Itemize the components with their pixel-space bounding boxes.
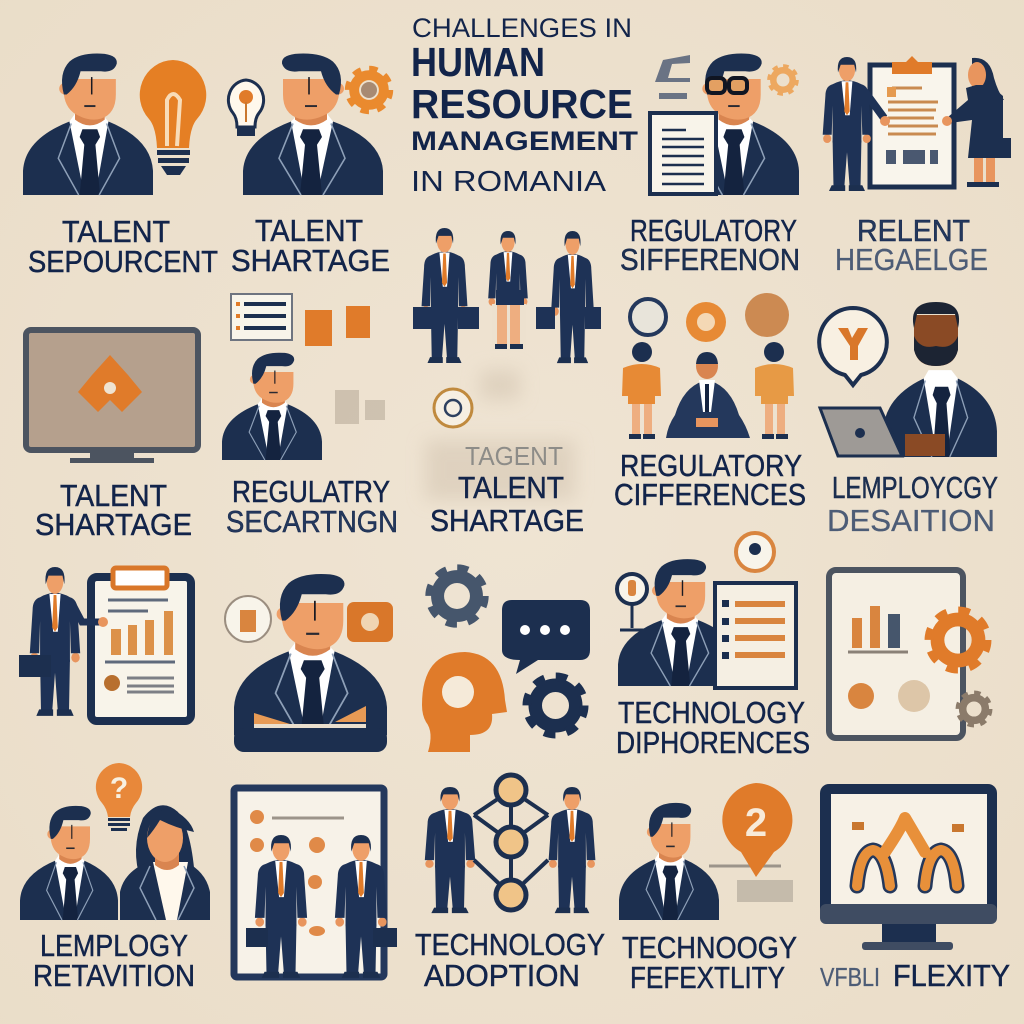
- title: CHALLENGES IN: [412, 13, 632, 43]
- briefcase: [19, 655, 51, 677]
- panel: regulatory cifferences: [614, 293, 806, 512]
- label: TECHNOLOGY: [415, 927, 605, 962]
- label: CIFFERENCES: [614, 477, 806, 512]
- briefcases: [246, 928, 397, 947]
- title: IN ROMANIA: [411, 166, 607, 198]
- woman right: [942, 58, 1011, 187]
- label: HEGAELGE: [835, 242, 988, 277]
- panel: employcgy desaition: [819, 302, 998, 538]
- faint smudge: [425, 370, 575, 500]
- label: [415, 927, 605, 993]
- icon: list panel: [715, 583, 796, 688]
- label: [33, 928, 195, 993]
- label: RETAVITION: [33, 958, 195, 993]
- label: SIFFERENON: [620, 242, 800, 277]
- icon: orange head: [422, 652, 507, 752]
- label: [430, 441, 584, 538]
- panel: two men on board: [234, 788, 397, 978]
- icon: question bulb: ?: [110, 772, 128, 805]
- label: TAGENT: [465, 441, 563, 471]
- panel: three standing men: [413, 228, 601, 538]
- label: VFBLI: [820, 962, 880, 992]
- dark skin face: [913, 302, 959, 366]
- label: SEPOURCENT: [28, 244, 218, 279]
- panel: relent hegaelge: [823, 56, 1011, 277]
- label: [616, 695, 810, 760]
- seated figure: [666, 352, 750, 438]
- label: REGULATORY: [630, 213, 797, 248]
- title: [411, 13, 639, 198]
- icon: laptop: [820, 408, 902, 456]
- label: TECHNOOGY: [622, 930, 797, 965]
- clipboard: [870, 56, 954, 187]
- icon: orange pin: 2: [745, 801, 767, 845]
- presenter: [30, 567, 108, 716]
- icon: document: [650, 113, 716, 194]
- label: DESAITION: [827, 503, 995, 538]
- icon: glasses: [707, 78, 747, 93]
- faded chart: [335, 390, 385, 424]
- panel: technology adoption: [415, 775, 605, 993]
- icons: three circles: [630, 293, 789, 342]
- icon: light bulb: [140, 60, 206, 175]
- label: REGULATRY: [232, 474, 390, 509]
- icon: small flourishes: [852, 822, 964, 832]
- label: TECHNOLOGY: [618, 695, 805, 730]
- panel: employ retavition: [20, 763, 210, 993]
- faded bars: [737, 880, 793, 902]
- panel: talent shartage 1: [228, 54, 390, 278]
- man left: [823, 57, 890, 191]
- icon: target: [225, 596, 271, 642]
- icon: orange boxes: [305, 306, 370, 346]
- panel: talent sepourcent: [23, 54, 218, 279]
- label: [614, 448, 806, 512]
- icon: orange gear: [929, 611, 987, 669]
- label: LEMPLOGY: [40, 928, 188, 963]
- icon: dark gear: [430, 569, 484, 623]
- briefcases: [413, 307, 601, 329]
- panel: regulatory sifferenon: [620, 54, 800, 277]
- label: [820, 958, 1010, 993]
- label: [620, 213, 800, 277]
- label: FEFEXTLITY: [630, 960, 785, 995]
- panel: man with clipboard chart: [19, 567, 191, 721]
- panel: head with gears and speech: [422, 569, 590, 752]
- icon: speech bubble: [502, 600, 590, 674]
- label: RELENT: [857, 213, 970, 248]
- icon: tablet: [829, 570, 963, 738]
- label: TALENT: [62, 214, 170, 249]
- icon: orange pin: [709, 783, 792, 877]
- woman: [120, 805, 210, 920]
- clipboard: [91, 568, 191, 721]
- icon: question bulb: [96, 763, 142, 831]
- label: TALENT: [60, 478, 167, 513]
- panel: tablet with gear: [829, 570, 990, 738]
- label: REGULATORY: [620, 448, 802, 483]
- icon: microphone: [617, 574, 647, 630]
- board: [234, 788, 384, 977]
- label: TALENT: [255, 213, 363, 248]
- figures: [622, 342, 794, 439]
- network nodes: [474, 775, 548, 910]
- arm: [905, 434, 945, 456]
- label: DIPHORENCES: [616, 725, 810, 760]
- panel: crossed arms man: [225, 574, 393, 752]
- label: SECARTNGN: [226, 504, 398, 539]
- label: SHARTAGE: [231, 243, 390, 278]
- title: HUMAN: [411, 39, 545, 85]
- crossed arms: [234, 706, 387, 752]
- icon: gear: [348, 69, 390, 111]
- label: [231, 213, 390, 278]
- panel: technology diphorences: [616, 533, 810, 760]
- panel: regulatry secartngn: [222, 294, 398, 539]
- icon: keyhole badge: [736, 533, 774, 571]
- panel: monitor flexity: [820, 784, 1010, 993]
- label: ADOPTION: [424, 958, 580, 993]
- label: FLEXITY: [893, 958, 1010, 993]
- icon: stamp: [655, 55, 690, 99]
- label: [226, 474, 398, 539]
- label: [827, 470, 998, 538]
- title: RESOURCE: [411, 81, 633, 127]
- panel: technology fefextlity: [619, 783, 797, 995]
- label: SHARTAGE: [430, 503, 584, 538]
- icon: speech bubble: [819, 308, 887, 385]
- icon: orange gear: [769, 66, 797, 94]
- icon: monitor: [820, 784, 997, 950]
- panel: monitor talent shartage: [26, 330, 198, 542]
- icon: orange peaks: [857, 818, 957, 886]
- suit body: [883, 370, 997, 457]
- label: [28, 214, 218, 279]
- label: SHARTAGE: [35, 507, 192, 542]
- icon: orange badge: [347, 602, 393, 642]
- icon: small gear: [958, 693, 990, 725]
- icon: list card: [231, 294, 292, 340]
- title: MANAGEMENT: [411, 126, 639, 156]
- icon: monitor: [26, 330, 198, 463]
- label: [35, 478, 192, 542]
- label: [622, 930, 797, 995]
- label: TALENT: [458, 470, 564, 505]
- label: [835, 213, 988, 277]
- icon: navy gear: [527, 677, 584, 734]
- icon: faint target: [434, 389, 472, 427]
- icon: small bulb: [228, 80, 264, 136]
